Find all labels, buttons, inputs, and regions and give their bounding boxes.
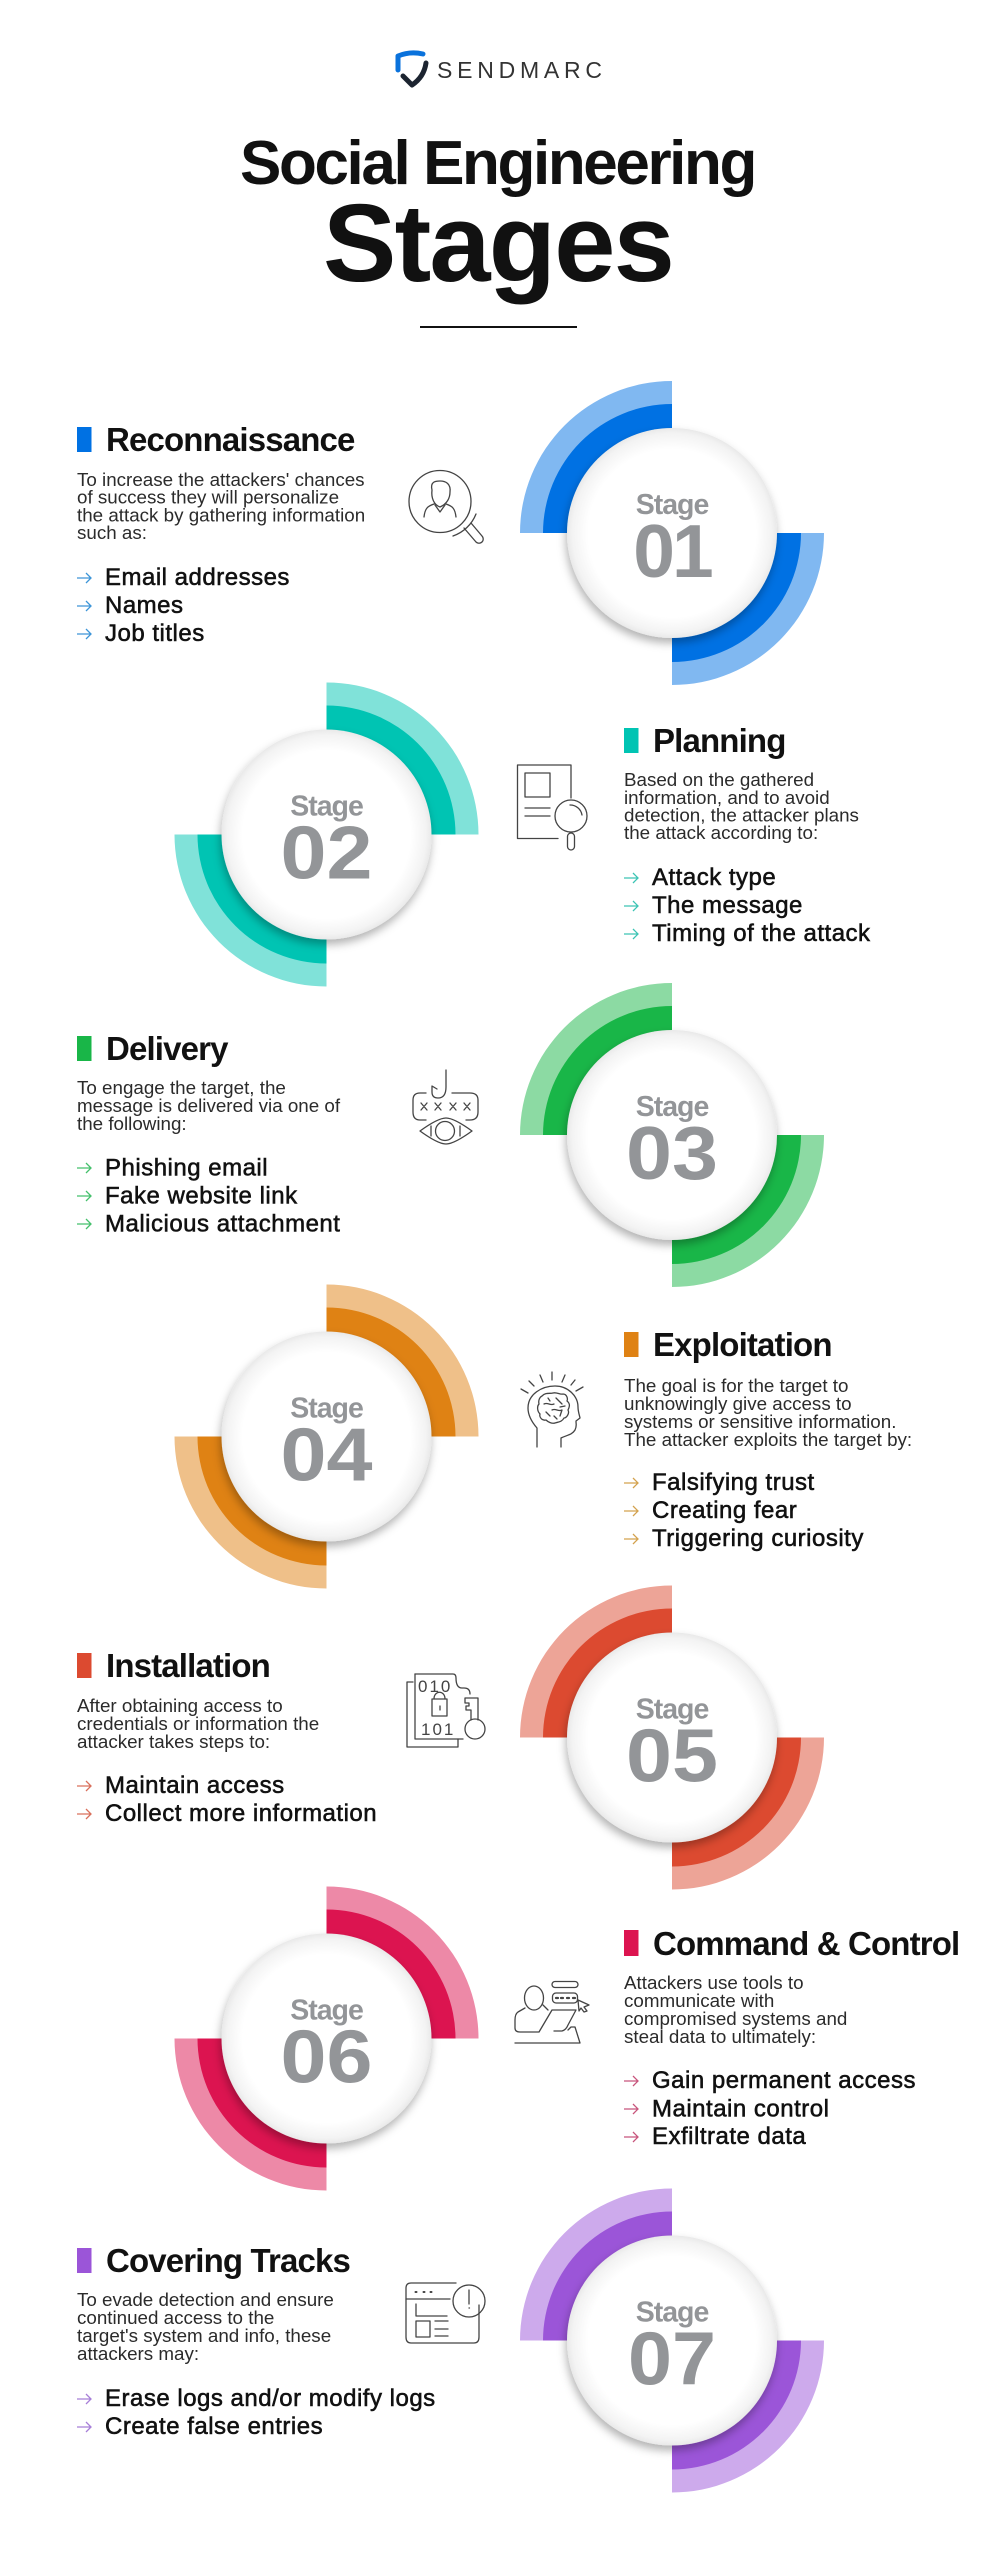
icon: binary files with lock and key: 010 bbox=[418, 1677, 452, 1696]
stage 2 graphic: 02 bbox=[281, 810, 372, 894]
description: message is delivered via one of bbox=[77, 1095, 341, 1116]
list: Maintain control bbox=[652, 2096, 829, 2122]
stage 6 graphic: 06 bbox=[281, 2014, 372, 2098]
icon: binary files with lock and key: 101 bbox=[421, 1720, 455, 1739]
list bbox=[624, 864, 871, 947]
stage 5 graphic bbox=[520, 1586, 824, 1890]
stage 3 graphic: Stage bbox=[636, 1091, 708, 1123]
list bbox=[77, 1154, 340, 1238]
heading: Reconnaissance bbox=[106, 421, 355, 458]
icon: head with brain bbox=[521, 1372, 583, 1447]
list: Attack type bbox=[652, 864, 776, 891]
stage 1 graphic: 01 bbox=[633, 509, 712, 593]
title: Social Engineering bbox=[240, 129, 755, 198]
panel: Exploitation bbox=[624, 1326, 912, 1552]
icon: phishing hook and eye bbox=[413, 1070, 478, 1144]
panel: Installation bbox=[77, 1647, 377, 1827]
description: To evade detection and ensure bbox=[77, 2289, 334, 2310]
stage 4 graphic bbox=[174, 1284, 478, 1588]
title: Stages bbox=[323, 182, 673, 305]
list: Gain permanent access bbox=[652, 2067, 916, 2094]
list: Falsifying trust bbox=[652, 1469, 815, 1496]
stage 3 graphic: 03 bbox=[626, 1111, 718, 1195]
heading: Command & Control bbox=[653, 1925, 959, 1962]
description: credentials or information the bbox=[77, 1713, 319, 1734]
list bbox=[624, 2067, 916, 2150]
logo: Sendmarc bbox=[398, 53, 602, 85]
stage 7 graphic: 07 bbox=[628, 2316, 716, 2400]
panel: Reconnaissance bbox=[77, 421, 365, 647]
panel: Command & Control bbox=[624, 1925, 959, 2150]
description: attacker takes steps to: bbox=[77, 1731, 270, 1752]
description: information, and to avoid bbox=[624, 787, 830, 808]
panel: Delivery bbox=[77, 1030, 341, 1238]
icon: browser window with alert bbox=[406, 2283, 485, 2343]
stage 1 graphic bbox=[520, 381, 824, 685]
list: Create false entries bbox=[105, 2413, 323, 2440]
list: Malicious attachment bbox=[105, 1210, 340, 1238]
description: The goal is for the target to bbox=[624, 1375, 848, 1396]
heading: Exploitation bbox=[653, 1326, 832, 1363]
heading: Installation bbox=[106, 1647, 270, 1684]
list: Names bbox=[105, 592, 184, 619]
panel: Planning bbox=[624, 722, 871, 947]
icon: binary files with lock and key bbox=[407, 1674, 485, 1747]
list: Triggering curiosity bbox=[652, 1525, 864, 1552]
description: unknowingly give access to bbox=[624, 1393, 852, 1414]
list: Maintain access bbox=[105, 1772, 285, 1799]
list bbox=[77, 2385, 436, 2440]
list bbox=[77, 564, 290, 647]
icon: shield bbox=[398, 53, 426, 85]
heading: Planning bbox=[653, 722, 786, 759]
description: of success they will personalize bbox=[77, 487, 339, 508]
description: The attacker exploits the target by: bbox=[624, 1429, 912, 1450]
list bbox=[624, 1469, 864, 1552]
stage 2 graphic bbox=[174, 682, 478, 986]
description: the following: bbox=[77, 1113, 187, 1134]
list: Timing of the attack bbox=[652, 920, 871, 947]
list: Erase logs and/or modify logs bbox=[105, 2385, 436, 2412]
stage 6 graphic bbox=[174, 1886, 478, 2190]
description: Based on the gathered bbox=[624, 769, 814, 790]
description: communicate with bbox=[624, 1990, 774, 2011]
list: Creating fear bbox=[652, 1497, 797, 1524]
stage 4 graphic: Stage bbox=[290, 1392, 363, 1424]
description: attackers may: bbox=[77, 2343, 199, 2364]
description: the attack by gathering information bbox=[77, 504, 365, 526]
stage 2 graphic: Stage bbox=[290, 790, 363, 822]
stage 3 graphic bbox=[520, 983, 824, 1287]
title bbox=[240, 129, 755, 305]
description: target's system and info, these bbox=[77, 2325, 331, 2346]
icon: person at laptop with password field bbox=[515, 1982, 589, 2043]
stage 1 graphic: Stage bbox=[636, 489, 708, 521]
description: steal data to ultimately: bbox=[624, 2026, 816, 2047]
description: compromised systems and bbox=[624, 2008, 847, 2029]
stage 5 graphic: 05 bbox=[626, 1714, 718, 1798]
description: To engage the target, the bbox=[77, 1077, 286, 1098]
description: the attack according to: bbox=[624, 822, 818, 843]
stage 7 graphic: Stage bbox=[636, 2296, 708, 2328]
list: Exfiltrate data bbox=[652, 2123, 806, 2150]
description: To increase the attackers' chances bbox=[77, 469, 365, 490]
list: The message bbox=[652, 892, 803, 919]
wordmark: SENDMARC bbox=[437, 57, 602, 83]
heading: Delivery bbox=[106, 1030, 229, 1067]
list: Phishing email bbox=[105, 1154, 268, 1182]
list bbox=[77, 1772, 377, 1827]
description: After obtaining access to bbox=[77, 1695, 283, 1716]
description: Attackers use tools to bbox=[624, 1972, 804, 1993]
list: Collect more information bbox=[105, 1800, 377, 1827]
stage 7 graphic bbox=[520, 2188, 824, 2492]
stage 4 graphic: 04 bbox=[281, 1412, 373, 1496]
description: detection, the attacker plans bbox=[624, 804, 859, 826]
panel: Covering Tracks bbox=[77, 2242, 436, 2440]
stage 5 graphic: Stage bbox=[636, 1694, 708, 1726]
heading: Covering Tracks bbox=[106, 2242, 350, 2279]
list: Fake website link bbox=[105, 1182, 298, 1210]
stage 6 graphic: Stage bbox=[290, 1994, 363, 2026]
list: Email addresses bbox=[105, 564, 290, 591]
icon: document under magnifier bbox=[518, 765, 587, 850]
icon: person under magnifier bbox=[409, 470, 483, 543]
list: Job titles bbox=[105, 620, 205, 647]
description: continued access to the bbox=[77, 2307, 274, 2328]
description: systems or sensitive information. bbox=[624, 1411, 896, 1432]
description: such as: bbox=[77, 522, 147, 543]
